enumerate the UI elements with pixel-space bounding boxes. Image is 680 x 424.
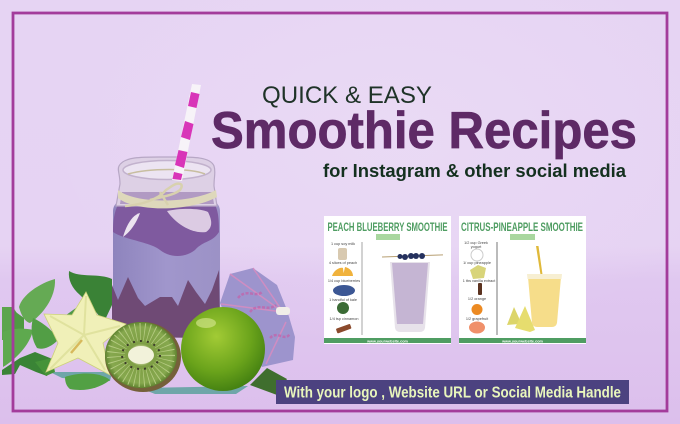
callout banner [276, 380, 629, 404]
smoothie glass and pineapple [507, 246, 562, 332]
ingredient list: 1/ cup pineapple [463, 261, 491, 265]
dark bottom layer [112, 270, 220, 338]
icon: star fruit [44, 292, 126, 375]
card title: PEACH BLUEBERRY SMOOTHIE [328, 222, 448, 234]
ingredient icons [469, 249, 486, 334]
ingredient list [328, 242, 360, 321]
divider [362, 242, 363, 335]
heading: smoothie recipes: Smoothie Recipes [211, 102, 637, 160]
panel: peach blueberry smoothie card [324, 216, 451, 344]
card title: CITRUS-PINEAPPLE SMOOTHIE [461, 222, 583, 234]
panel: citrus pineapple smoothie card [459, 216, 586, 344]
jar highlight left [123, 213, 140, 237]
ingredient list: 1 tbs vanilla extract [463, 279, 496, 283]
jar highlight right [167, 209, 211, 232]
callout banner: With your logo , Website URL or Social Media Handle [284, 384, 621, 402]
ingredient list: 4 slices of peach [329, 261, 357, 265]
subheading: for Instagram & other social media [323, 161, 627, 181]
smoothie glass [382, 253, 443, 332]
ingredient list: 1/4 cup blueberries [328, 279, 360, 283]
hashtag tag [376, 234, 400, 240]
purple top layer [113, 205, 219, 256]
twine [118, 190, 217, 208]
icon: paper umbrella [220, 268, 295, 367]
ingredient list: 1 handful of kale [329, 298, 357, 302]
footer bar [324, 338, 451, 343]
ingredient icons [332, 248, 355, 334]
icon: kiwi [105, 322, 181, 392]
ingredient list: yogurt [471, 245, 482, 249]
heading: quick and easy: QUICK & EASY [262, 82, 432, 109]
ingredient list: 1 cup soy milk [331, 242, 355, 246]
icon: straw [172, 84, 201, 181]
icon: mason jar [112, 157, 220, 338]
hashtag tag [510, 234, 535, 240]
jar neck glass [116, 157, 217, 206]
icon: lime [181, 307, 265, 391]
ingredient list: 1/2 cup Greek [464, 241, 488, 245]
footer bar [459, 338, 586, 343]
ingredient list: 1/4 tsp cinnamon [330, 317, 358, 321]
ingredient list: 1/2 orange [468, 297, 486, 301]
footer url: www.yourwebsite.com [366, 339, 409, 343]
illustration: smoothie jar and fruit [2, 84, 295, 395]
footer url: www.yourwebsite.com [501, 339, 544, 343]
table shadow [50, 372, 248, 394]
ingredient list: 1/2 grapefruit [466, 317, 489, 321]
ingredient list [463, 241, 496, 321]
divider [496, 242, 498, 335]
icon: mint leaves [2, 271, 287, 395]
